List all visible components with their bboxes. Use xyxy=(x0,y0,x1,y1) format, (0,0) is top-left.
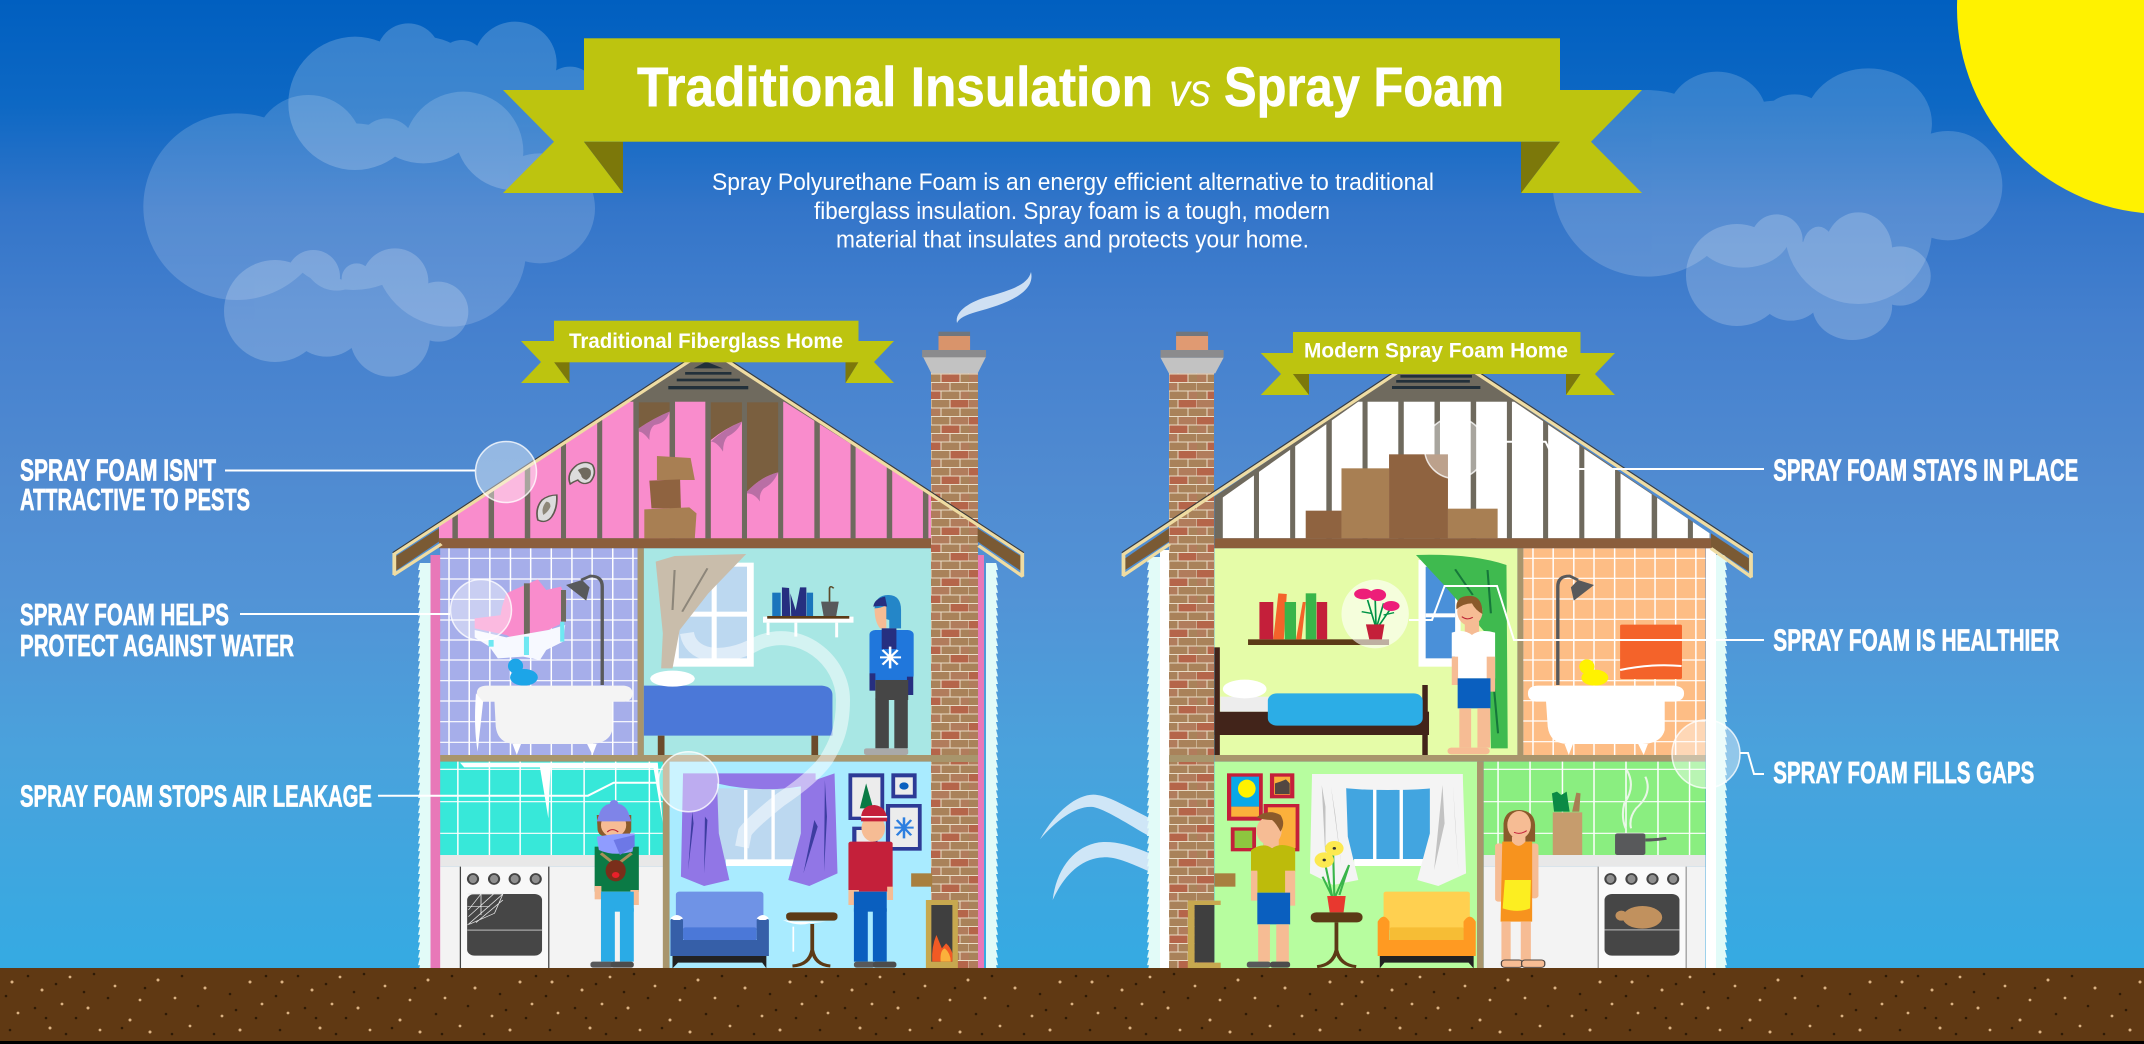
chimney smoke xyxy=(957,272,1031,323)
air escaping between houses xyxy=(1040,795,1150,900)
ribbon: modern spray foam home xyxy=(1261,332,1615,395)
shower xyxy=(581,576,602,685)
right shower xyxy=(1558,576,1578,685)
highlight bubbles xyxy=(450,418,1740,812)
pests xyxy=(537,462,594,521)
ribbon left fold xyxy=(584,142,623,193)
white curtains xyxy=(1310,774,1466,886)
cold kitchen xyxy=(440,762,663,968)
right fireplace and mantel xyxy=(1188,873,1235,968)
right bathroom xyxy=(1523,548,1706,755)
person in red sweater xyxy=(848,805,896,968)
callout: pests xyxy=(20,453,250,517)
right bedroom xyxy=(1214,548,1517,755)
roof vent xyxy=(668,362,748,389)
title ribbon xyxy=(503,38,1642,193)
cobwebbed oven xyxy=(460,867,549,968)
cold bed xyxy=(644,671,832,755)
intro paragraph: material that insulates and protects your home. xyxy=(836,227,1309,254)
bathtub xyxy=(477,686,633,744)
left bedroom xyxy=(644,548,932,755)
right house upper floor and attic xyxy=(1214,347,1713,755)
white spray foam xyxy=(1223,400,1710,538)
utensil crock xyxy=(1552,792,1582,855)
leader lines xyxy=(225,442,1764,796)
left bathroom xyxy=(440,548,638,755)
intro paragraph: Spray Polyurethane Foam is an energy efficient alternative to traditional xyxy=(712,169,1434,196)
rubber duck xyxy=(508,659,538,686)
title text: Traditional Insulation xyxy=(637,55,1153,118)
flowers xyxy=(1315,841,1349,912)
right house lower floor xyxy=(1214,755,1706,968)
right chimney mortar band xyxy=(1169,755,1214,762)
left roof xyxy=(393,346,1024,577)
callout: water: SPRAY FOAM HELPS xyxy=(20,597,229,632)
attic beam xyxy=(439,538,933,548)
air stream through left house xyxy=(687,633,843,847)
pink fiberglass insulation xyxy=(439,400,937,538)
floor slab xyxy=(440,755,932,762)
purple curtains xyxy=(681,773,837,886)
living room window xyxy=(717,788,803,866)
bookshelf xyxy=(1248,593,1389,645)
chimney mortar band xyxy=(931,755,978,762)
bedroom window xyxy=(673,563,754,667)
person in orange dress xyxy=(1495,810,1545,967)
left house walls xyxy=(418,555,998,968)
callout: pests: ATTRACTIVE TO PESTS xyxy=(20,482,250,517)
right attic gable xyxy=(1214,347,1710,538)
neat boxes xyxy=(1306,454,1498,538)
right floor slab xyxy=(1214,755,1706,762)
warm living room xyxy=(1214,762,1477,968)
right attic beam xyxy=(1214,538,1713,548)
ribbon: modern spray foam home: Modern Spray Foam Home xyxy=(1304,340,1568,363)
right roof xyxy=(1122,344,1753,577)
steaming pot xyxy=(1615,770,1666,855)
ribbon left tail xyxy=(503,90,623,193)
right lower divider xyxy=(1477,762,1484,968)
water damaged wall xyxy=(475,579,566,660)
callout: water xyxy=(20,597,294,663)
cloud: lower right xyxy=(1686,212,1931,340)
framed pictures xyxy=(848,773,922,851)
left house lower floor xyxy=(440,755,932,968)
ground xyxy=(0,968,2144,1044)
sun xyxy=(1957,0,2144,214)
sunny window xyxy=(1344,787,1431,866)
clean window xyxy=(1419,560,1461,667)
intro paragraph: fiberglass insulation. Spray foam is a tough, modern xyxy=(814,198,1330,225)
side table xyxy=(783,912,837,966)
left house upper floor and attic xyxy=(438,362,931,755)
ribbon main band xyxy=(584,38,1560,142)
cloud: lower xyxy=(224,248,468,377)
left fireplace and mantel xyxy=(911,873,958,968)
eaves xyxy=(396,528,439,571)
attic gable xyxy=(439,350,978,538)
title spray foam: Spray Foam xyxy=(1224,55,1504,118)
left chimney bricks xyxy=(931,373,978,968)
right roof vent xyxy=(1392,375,1480,389)
panel: modern spray foam home xyxy=(1122,332,1753,968)
person in green sweater xyxy=(590,800,639,968)
orange armchair xyxy=(1378,892,1476,968)
callout: air leakage: SPRAY FOAM STOPS AIR LEAKAGE xyxy=(20,779,372,814)
callout: pests: SPRAY FOAM ISN'T xyxy=(20,453,216,488)
title vs: vs xyxy=(1169,64,1211,116)
right chimney top xyxy=(1161,332,1224,373)
left chimney top xyxy=(922,332,986,373)
cold shelf xyxy=(763,587,853,637)
orange towel xyxy=(1620,625,1682,679)
right chimney bricks xyxy=(1169,373,1214,968)
intro paragraph xyxy=(712,169,1434,254)
ribbon right tail xyxy=(1521,90,1642,193)
stored boxes xyxy=(644,456,697,538)
flower highlight bubble xyxy=(1341,580,1409,648)
missing insulation gaps xyxy=(639,402,778,538)
warm oven xyxy=(1598,867,1687,968)
cloud: upper xyxy=(288,22,598,190)
clean bathtub xyxy=(1528,686,1684,744)
divider xyxy=(638,548,644,755)
ribbon: traditional fiberglass home xyxy=(521,321,894,383)
bed xyxy=(1214,647,1429,755)
panel: traditional fiberglass home xyxy=(393,332,1024,968)
lower divider xyxy=(663,762,670,968)
ribbon: traditional fiberglass home: Traditional Fiberglass Home xyxy=(569,330,843,353)
callout: water: PROTECT AGAINST WATER xyxy=(20,628,294,663)
warm side table xyxy=(1311,912,1363,967)
cloud: large xyxy=(143,92,595,327)
blue armchair xyxy=(670,892,769,968)
ribbon right fold xyxy=(1521,142,1560,193)
person in blue hoodie xyxy=(864,595,914,755)
person in olive shirt xyxy=(1247,812,1295,968)
person in white shirt xyxy=(1448,596,1495,754)
clouds left xyxy=(143,22,598,377)
cloud: large right xyxy=(1553,68,2002,304)
yellow duck xyxy=(1579,659,1608,686)
flower pot xyxy=(1354,589,1400,639)
torn curtain xyxy=(656,554,746,668)
clouds right xyxy=(1553,68,2002,340)
green curtain xyxy=(1416,555,1508,748)
colourful pictures xyxy=(1227,773,1299,851)
right house walls xyxy=(1147,548,1727,968)
cold living room xyxy=(670,762,932,968)
right upper divider xyxy=(1517,548,1523,755)
warm kitchen xyxy=(1484,762,1706,968)
